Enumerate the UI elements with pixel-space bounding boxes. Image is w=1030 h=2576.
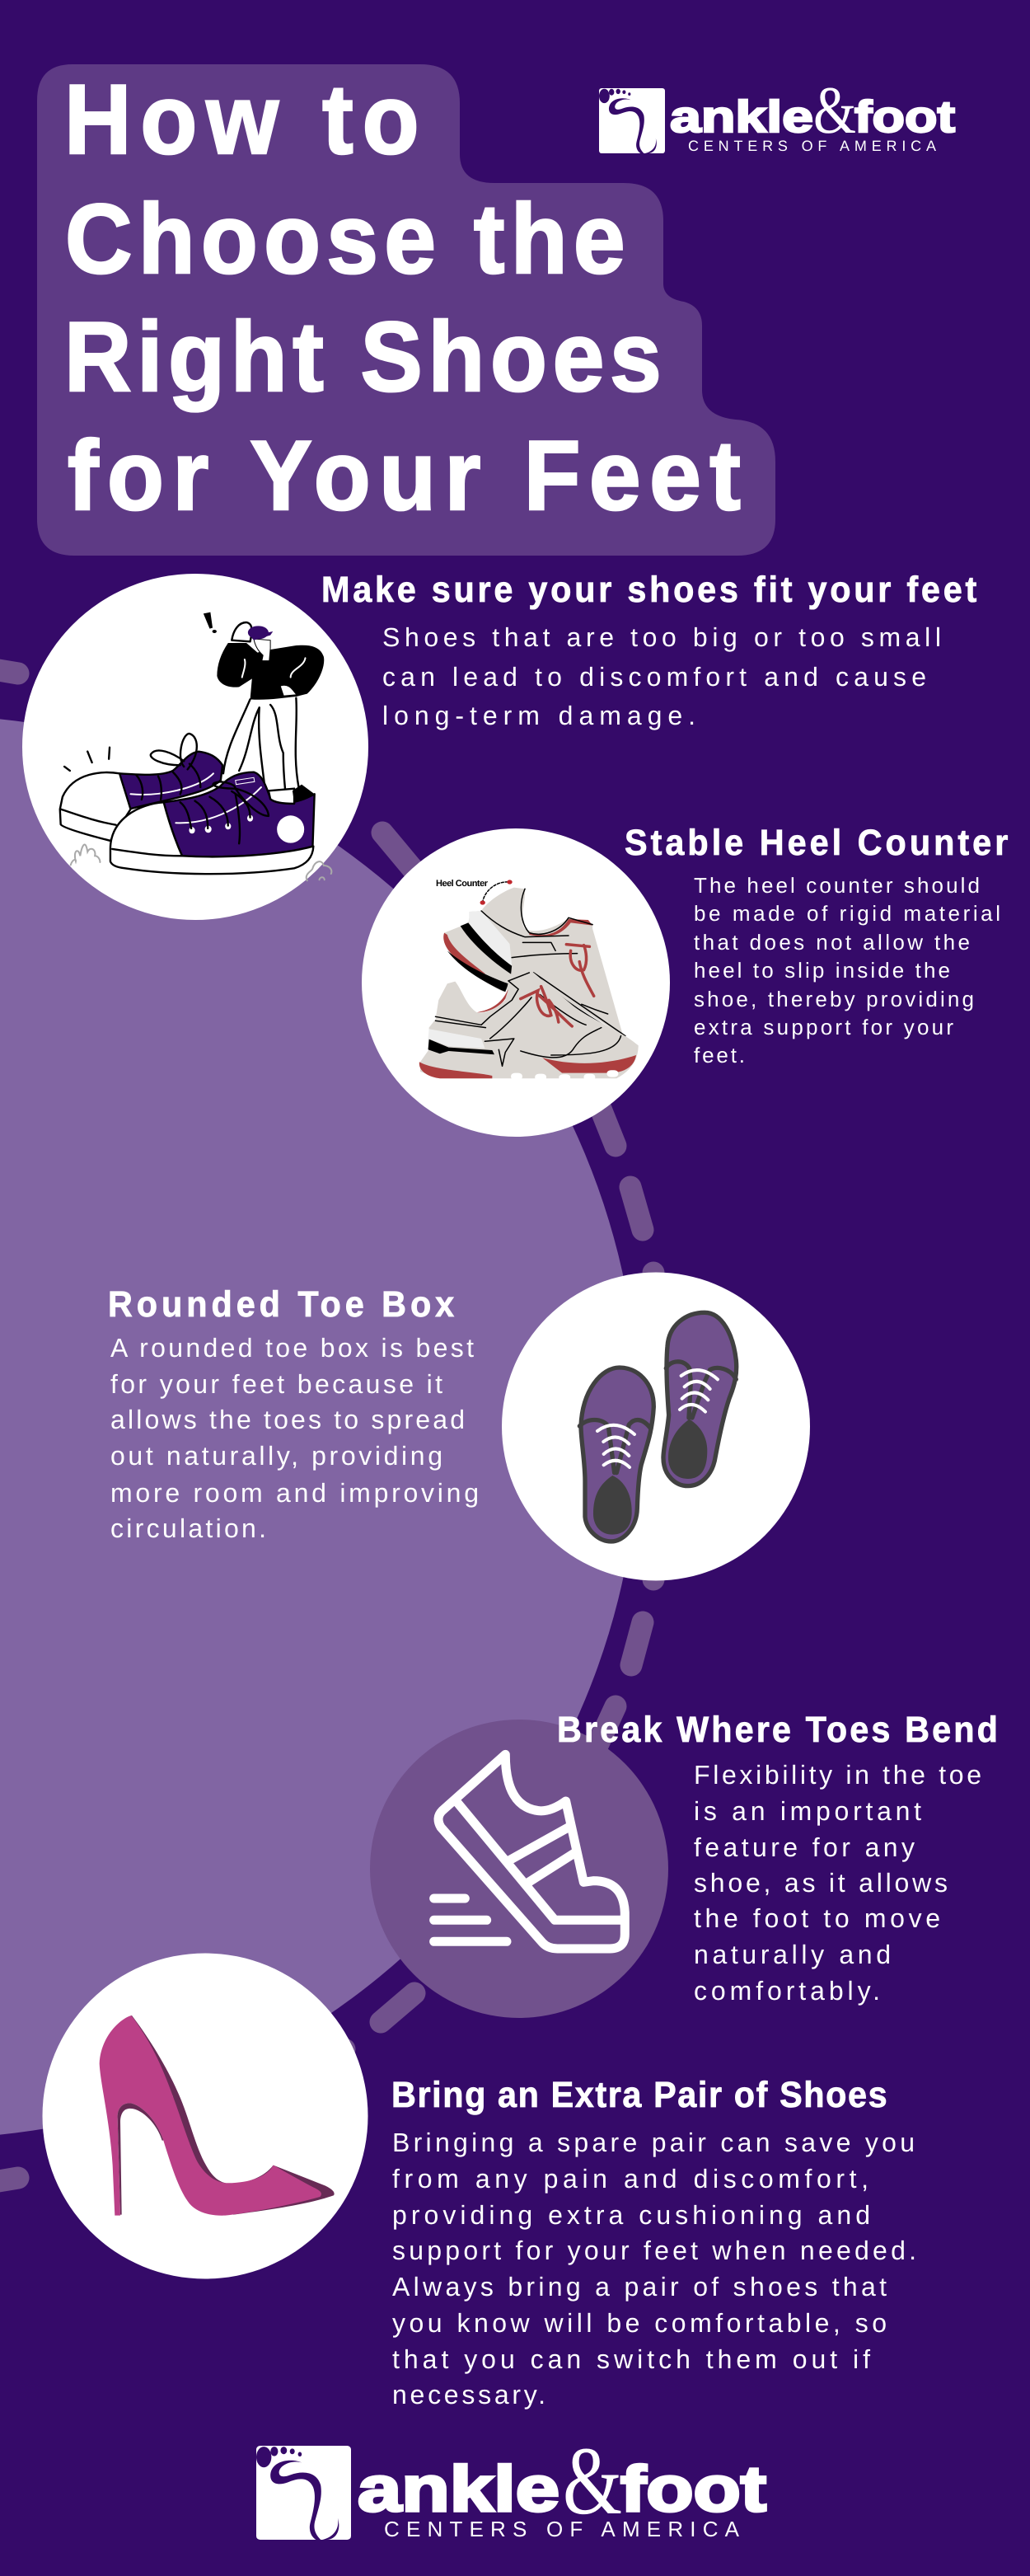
logo: bottom bbox=[256, 2427, 766, 2541]
circle 5 bbox=[43, 1954, 368, 2278]
text block 4: comfortably. bbox=[694, 1976, 880, 2006]
illustration: high heel bbox=[100, 2015, 335, 2216]
heading 2: Stable Heel Counter bbox=[625, 823, 1008, 863]
icon: foot logo bbox=[599, 88, 665, 153]
icon: foot logo bbox=[256, 2446, 351, 2540]
back sneaker bbox=[60, 734, 222, 841]
text block 3: out naturally, providing bbox=[110, 1441, 442, 1471]
text block 5 bbox=[392, 2128, 916, 2409]
text block 5: Always bring a pair of shoes that bbox=[392, 2272, 887, 2302]
title: How to bbox=[64, 64, 419, 175]
text block 3: A rounded toe box is best bbox=[110, 1333, 474, 1363]
text block 4: is an important bbox=[694, 1796, 921, 1826]
title: Right Shoes bbox=[64, 302, 662, 412]
illustration: heel counter sneakers bbox=[419, 880, 639, 1082]
label: heel counter: Heel Counter bbox=[436, 879, 489, 889]
heading 1: Make sure your shoes fit your feet bbox=[321, 570, 977, 610]
large background circle bbox=[0, 716, 639, 2138]
text block 2: that does not allow the bbox=[694, 930, 970, 955]
logo: top: ankle bbox=[670, 92, 813, 142]
text block 2: extra support for your bbox=[694, 1015, 953, 1039]
logo: top bbox=[599, 73, 955, 154]
text block 4: feature for any bbox=[694, 1832, 915, 1862]
title: for Your Feet bbox=[68, 420, 741, 531]
text block 1: long-term damage. bbox=[382, 701, 695, 730]
text block 2: The heel counter should bbox=[694, 873, 980, 898]
text block 2: shoe, thereby providing bbox=[694, 987, 974, 1011]
text block 3 bbox=[110, 1333, 479, 1543]
icon: running shoe bbox=[434, 1754, 625, 1949]
illustration: person on giant sneakers bbox=[60, 612, 331, 880]
front sneaker bbox=[110, 772, 315, 874]
exclamation mark bbox=[204, 612, 217, 633]
text block 4 bbox=[694, 1760, 981, 2006]
text block 5: support for your feet when needed. bbox=[392, 2236, 916, 2265]
text block 4: naturally and bbox=[694, 1940, 891, 1969]
logo: bottom: foot bbox=[620, 2452, 766, 2525]
text block 4: Flexibility in the toe bbox=[694, 1760, 981, 1790]
logo: bottom: & bbox=[563, 2427, 622, 2535]
left shoe bbox=[579, 1368, 653, 1541]
circle 1 bbox=[22, 574, 368, 920]
text block 5: necessary. bbox=[392, 2380, 545, 2409]
heading 4: Break Where Toes Bend bbox=[557, 1710, 998, 1750]
text block 3: for your feet because it bbox=[110, 1369, 442, 1399]
heading 5: Bring an Extra Pair of Shoes bbox=[391, 2075, 887, 2115]
sparks bbox=[64, 748, 110, 771]
logo: bottom: ankle bbox=[358, 2452, 559, 2525]
title: Choose the bbox=[65, 184, 625, 294]
circle 2 bbox=[362, 828, 670, 1137]
text block 1: can lead to discomfort and cause bbox=[382, 662, 926, 692]
logo: bottom: CENTERS OF AMERICA bbox=[384, 2517, 740, 2541]
right shoe bbox=[663, 1312, 737, 1486]
text block 3: more room and improving bbox=[110, 1478, 479, 1508]
logo: top: CENTERS OF AMERICA bbox=[688, 138, 936, 154]
text block 5: providing extra cushioning and bbox=[392, 2200, 870, 2230]
text block 5: you know will be comfortable, so bbox=[392, 2308, 887, 2338]
heel counter marker bbox=[480, 880, 513, 905]
text block 4: shoe, as it allows bbox=[694, 1868, 948, 1898]
text block 5: from any pain and discomfort, bbox=[392, 2164, 868, 2194]
text block 1 bbox=[382, 622, 941, 730]
dashed ring around the circle bbox=[0, 669, 653, 2183]
text block 2 bbox=[694, 873, 1000, 1067]
text block 5: that you can switch them out if bbox=[392, 2344, 870, 2374]
grass bbox=[71, 844, 100, 865]
title panel bbox=[37, 64, 775, 556]
illustration: pair of shoes from above bbox=[579, 1312, 737, 1541]
circle 4 bbox=[370, 1720, 668, 2018]
upper sneaker bbox=[443, 888, 625, 1036]
text block 2: feet. bbox=[694, 1043, 745, 1067]
text block 2: be made of rigid material bbox=[694, 901, 1000, 926]
lower sneaker bbox=[419, 973, 639, 1082]
text block 2: heel to slip inside the bbox=[694, 958, 950, 983]
logo: top: foot bbox=[854, 92, 955, 142]
heading 3: Rounded Toe Box bbox=[108, 1284, 455, 1325]
text block 1: Shoes that are too big or too small bbox=[382, 622, 941, 652]
person bbox=[217, 622, 324, 789]
logo: top: & bbox=[813, 73, 856, 148]
text block 3: allows the toes to spread bbox=[110, 1405, 465, 1434]
text block 5: Bringing a spare pair can save you bbox=[392, 2128, 915, 2157]
title bbox=[64, 64, 741, 531]
text block 4: the foot to move bbox=[694, 1903, 940, 1933]
circle 3 bbox=[502, 1273, 810, 1581]
text block 3: circulation. bbox=[110, 1513, 266, 1543]
